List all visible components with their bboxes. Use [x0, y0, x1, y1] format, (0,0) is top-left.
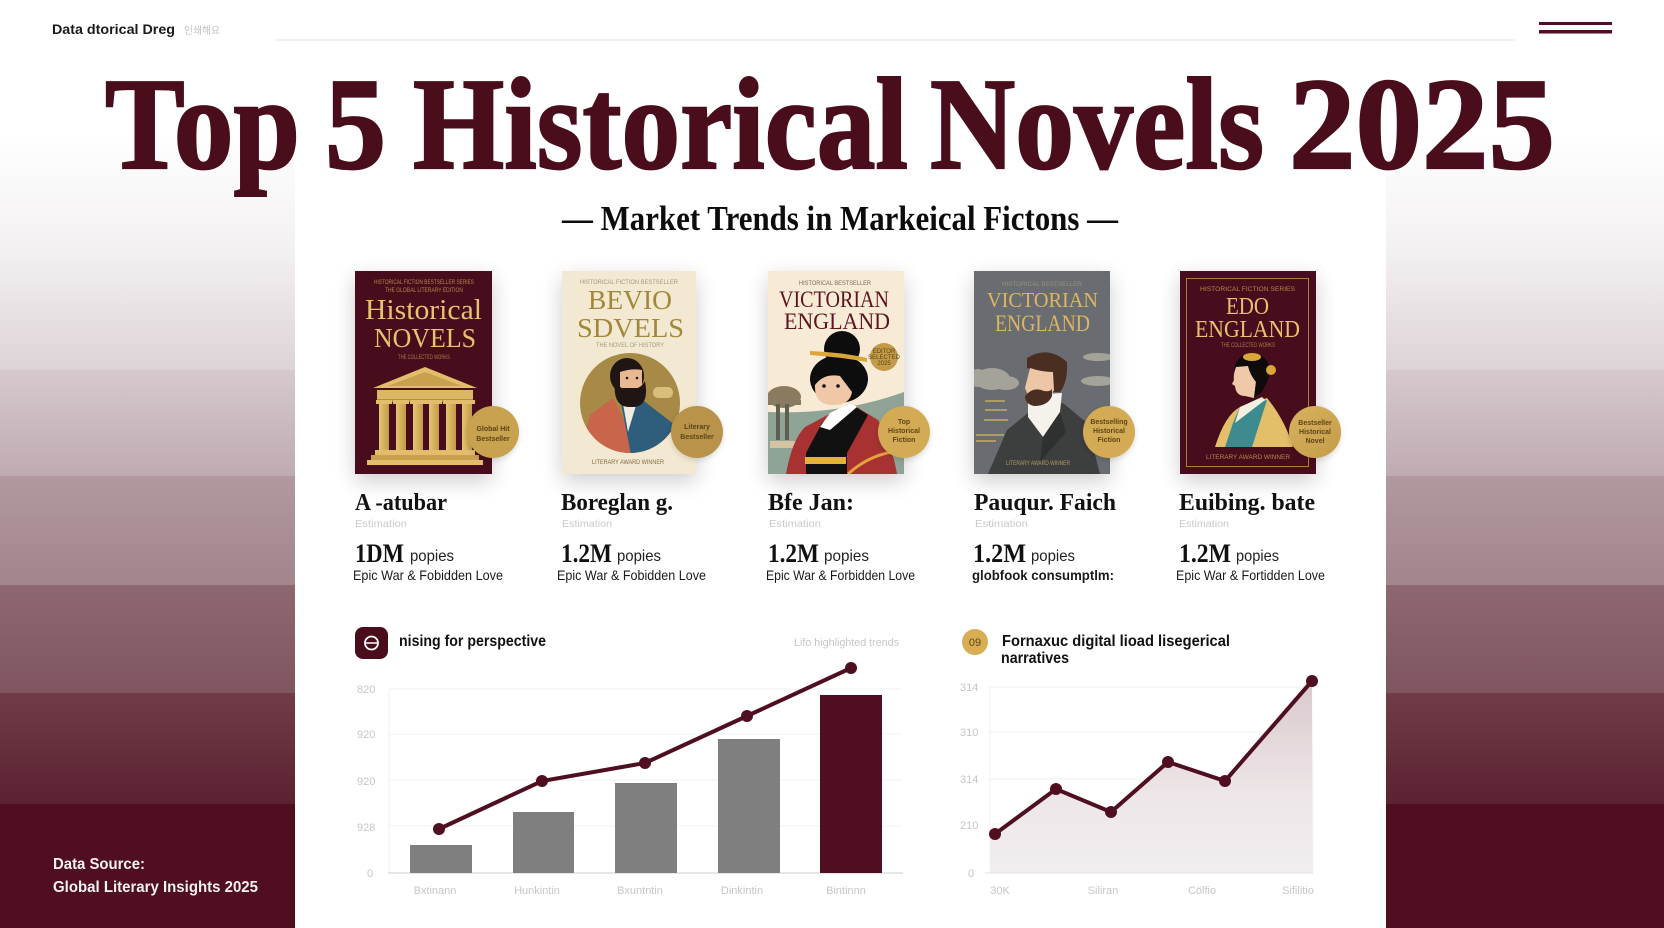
portrait: Edo figure: [1215, 353, 1293, 447]
portrait: woman in kimono: [767, 331, 904, 474]
central white panel: [295, 135, 1386, 928]
copies sold: 1.2M: [1179, 539, 1231, 568]
portrait: woman in kimono: 2025: [877, 361, 891, 367]
x axis labels: Hunkintin: [514, 885, 560, 897]
copies sold: [561, 539, 661, 568]
y axis labels: 314: [960, 774, 978, 786]
x axis labels: Cölfio: [1188, 885, 1216, 897]
theme line: Epic War & Forbidden Love: [766, 567, 915, 583]
book cover: Bevio Sdvels: [562, 271, 696, 474]
copies sold: 1.2M: [973, 539, 1026, 568]
category label: Estimation: [975, 518, 1028, 530]
book cover: Victorian England grey: ENGLAND: [995, 311, 1090, 336]
gold seal badge: [467, 406, 519, 458]
subtitle: — Market Trends in Markeical Fictons —: [561, 199, 1119, 238]
chart heading: nising for perspective: [399, 633, 546, 650]
book cover: Victorian England grey: HISTORICAL BESTSELLER: [1002, 282, 1083, 288]
area fill: [990, 681, 1313, 873]
portrait: bearded man: [578, 353, 680, 460]
book name: A -atubar: [355, 490, 447, 516]
header label: Data dtorical Dreg: [52, 21, 175, 37]
copies sold: 1.2M: [768, 539, 819, 568]
copies sold: [1179, 539, 1279, 568]
gold seal badge: Bestseller: [476, 436, 510, 443]
copies sold: popies: [1031, 548, 1075, 565]
gold seal badge: [671, 406, 723, 458]
header small grey label: 인쇄해요: [184, 24, 220, 37]
copies sold: popies: [1236, 548, 1279, 565]
book cover: Edo England: THE COLLECTED WORKS: [1221, 343, 1275, 349]
category label: Estimation: [1179, 518, 1229, 530]
y axis labels: 920: [357, 776, 375, 788]
icon: gold circle: [962, 629, 988, 655]
x axis labels: Bintinnn: [826, 885, 866, 897]
gold seal badge: [1083, 406, 1135, 458]
icon: menu bars: [1539, 22, 1612, 34]
trend line: [989, 675, 1318, 840]
chart heading: [1001, 633, 1230, 667]
book cover: Historical Novels: NOVELS: [374, 323, 476, 353]
book name: Pauqur. Faich: [974, 490, 1116, 516]
chart heading: Fornaxuc digital lioad lisegerical: [1002, 633, 1230, 650]
book name: Bfe Jan:: [768, 490, 854, 516]
x axis labels: 30K: [990, 885, 1010, 897]
copies sold: [355, 539, 454, 568]
y axis labels: 0: [367, 868, 373, 880]
x axis labels: [990, 885, 1314, 897]
book cover: Victorian England grey: LITERARY AWARD WINNER: [1006, 461, 1071, 467]
book cover: Historical Novels: [355, 271, 492, 474]
category label: Estimation: [562, 518, 612, 530]
copies sold: 1.2M: [561, 539, 612, 568]
copies sold: [768, 539, 869, 568]
book cover: Historical Novels: HISTORICAL FICTION BESTSELLER SERIES: [374, 280, 474, 286]
category label: Estimation: [769, 518, 821, 530]
gold seal badge: Historical: [888, 428, 920, 435]
area line chart panel: [960, 629, 1318, 897]
category label: Estimation: [355, 518, 407, 530]
gold seal badge: Top: [898, 419, 910, 426]
title: Top: [105, 52, 300, 197]
book cover: Edo England: EDO: [1226, 294, 1269, 320]
book cover: Victorian England: [767, 271, 904, 474]
title: [105, 52, 1555, 197]
data source footer: [53, 856, 258, 896]
title: 2025: [1289, 52, 1555, 197]
book card 1: [353, 271, 519, 583]
book cover: Bevio Sdvels: HISTORICAL FICTION BESTSELLER: [580, 280, 679, 286]
copies sold: popies: [617, 548, 661, 565]
gold seal badge: Fiction: [1098, 437, 1120, 444]
title: 5: [325, 52, 386, 197]
header bar: [52, 21, 1612, 40]
book cover: Bevio Sdvels: BEVIO: [588, 285, 672, 315]
book cover: Bevio Sdvels: LITERARY AWARD WINNER: [592, 460, 665, 466]
gold seal badge: Bestseller: [680, 434, 714, 441]
bars: [410, 695, 882, 873]
gold seal badge: Bestselling: [1090, 419, 1128, 426]
theme line: globfook consumptlm:: [972, 567, 1114, 583]
book cover: Victorian England grey: VICTORIAN: [987, 288, 1098, 312]
book card 5: [1176, 271, 1341, 583]
book cover: Historical Novels: Historical: [365, 295, 482, 326]
portrait: woman in kimono: SELECTED: [868, 355, 900, 361]
book cover: Edo England: ENGLAND: [1195, 317, 1300, 343]
gold seal badge: Historical: [1299, 429, 1331, 436]
book cover: Bevio Sdvels: THE NOVEL OF HISTORY: [596, 343, 664, 349]
x axis labels: Sifilitio: [1282, 885, 1314, 897]
x axis labels: [414, 885, 866, 897]
gold seal badge: Novel: [1305, 438, 1325, 445]
gold seal badge: Historical: [1093, 428, 1125, 435]
x axis labels: Siliran: [1088, 885, 1118, 897]
book cover: Historical Novels: THE COLLECTED WORKS: [398, 355, 450, 361]
book name: Boreglan g.: [561, 490, 673, 516]
copies sold: popies: [824, 548, 869, 565]
chart heading: narratives: [1001, 650, 1069, 667]
x axis labels: Bxtinann: [414, 885, 456, 897]
y axis labels: 0: [968, 868, 974, 880]
x axis labels: Dinkintin: [721, 885, 763, 897]
gold seal badge: Bestseller: [1298, 420, 1332, 427]
trend line: [433, 662, 857, 835]
y axis labels: 920: [357, 729, 375, 741]
x axis labels: Bxuntntin: [617, 885, 663, 897]
theme line: Epic War & Fobidden Love: [353, 567, 503, 583]
copies sold: popies: [410, 548, 454, 565]
portrait: Victorian gentleman: [969, 352, 1115, 474]
icon: temple: [367, 367, 483, 465]
data source footer: Global Literary Insights 2025: [53, 879, 258, 896]
gold seal badge: [878, 406, 930, 458]
copies sold: [973, 539, 1075, 568]
bar and line chart panel: [355, 627, 903, 897]
y axis labels: [357, 684, 375, 880]
y axis labels: 310: [960, 727, 978, 739]
gold seal badge: Fiction: [893, 437, 915, 444]
book cover: Edo England: LITERARY AWARD WINNER: [1206, 455, 1291, 461]
data source footer: Data Source:: [53, 856, 145, 873]
y axis labels: 314: [960, 682, 978, 694]
y axis labels: 820: [357, 684, 375, 696]
theme line: Epic War & Fobidden Love: [557, 567, 706, 583]
icon: gold circle: 09: [969, 637, 981, 649]
book name: Euibing. bate: [1179, 490, 1315, 516]
title: Novels: [930, 52, 1264, 197]
book cover: Victorian England: VICTORIAN: [779, 287, 889, 312]
gold seal badge: [1289, 406, 1341, 458]
book cover: Victorian England: HISTORICAL BESTSELLER: [799, 281, 872, 287]
book cover: Victorian England grey: [969, 271, 1115, 474]
book card 3: [766, 271, 930, 583]
title: Historical: [413, 52, 908, 197]
book cover: Bevio Sdvels: SDVELS: [577, 313, 684, 343]
gold seal badge: Literary: [684, 424, 710, 431]
chart note: Lifo highlighted trends: [794, 637, 899, 649]
book cover: Edo England: [1180, 271, 1316, 474]
y axis labels: 928: [357, 822, 375, 834]
copies sold: 1DM: [355, 539, 404, 568]
y axis labels: [960, 682, 978, 880]
y axis labels: 210: [960, 820, 978, 832]
book cover: Edo England: HISTORICAL FICTION SERIES: [1200, 287, 1295, 293]
portrait: woman in kimono: EDITOR: [873, 349, 896, 355]
gold seal badge: Global Hit: [476, 426, 510, 433]
book card 2: [557, 271, 723, 583]
book cover: Victorian England: ENGLAND: [784, 309, 890, 334]
theme line: Epic War & Fortidden Love: [1176, 567, 1325, 583]
book card 4: [969, 271, 1135, 583]
book cover: Historical Novels: THE GLOBAL LITERARY EDITION: [385, 288, 463, 294]
icon: chart badge: [355, 627, 388, 659]
